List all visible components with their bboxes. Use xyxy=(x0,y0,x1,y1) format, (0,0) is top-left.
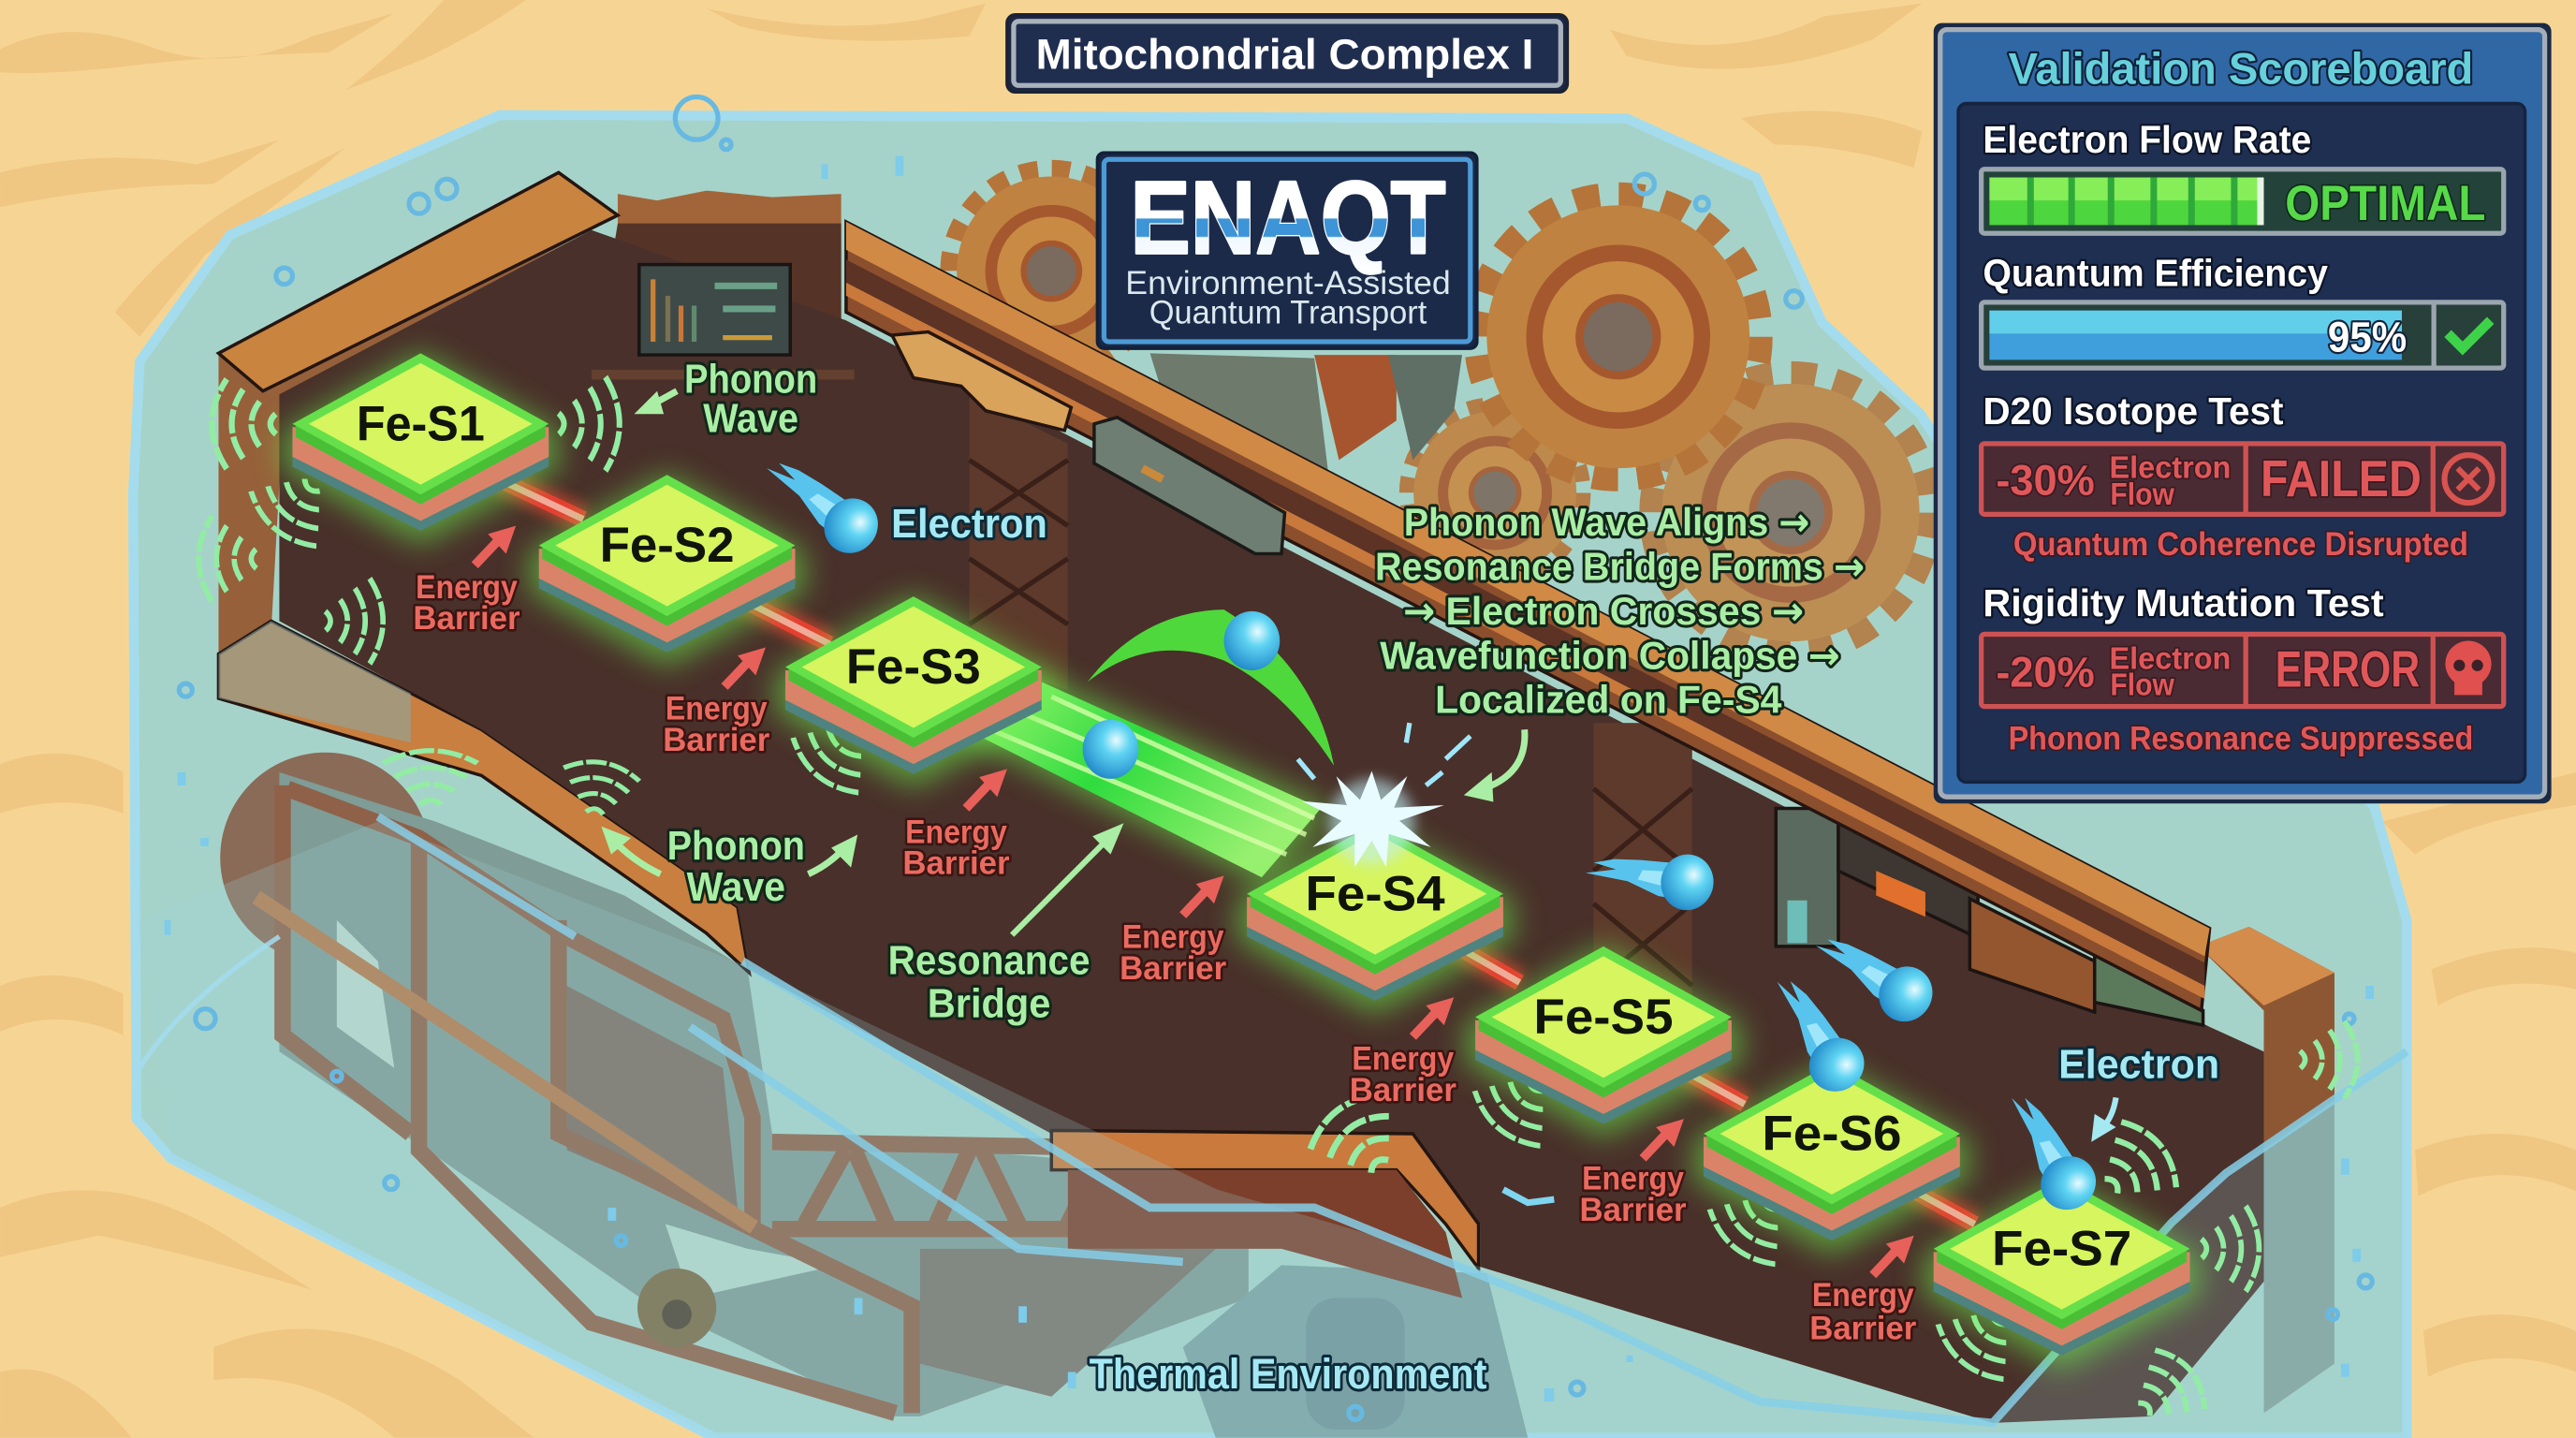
row: rigidity mutation test: Electron xyxy=(2110,641,2231,676)
resonance bridge xyxy=(949,674,1331,888)
row: quantum efficiency: 95% xyxy=(2328,314,2407,361)
sequence text block: Phonon Wave Aligns → xyxy=(1404,499,1809,545)
red energy links xyxy=(493,477,1975,1224)
ENAQT box: Quantum Transport xyxy=(1149,295,1427,331)
room walls xyxy=(218,172,2334,1413)
node Fe-S5 xyxy=(1466,945,1741,1138)
electron above Fe-S5 xyxy=(1582,839,1718,914)
energy barrier labels: Barrier xyxy=(413,600,520,637)
energy barrier labels: Barrier xyxy=(1809,1310,1917,1346)
row: quantum efficiency: Quantum Efficiency xyxy=(1983,251,2328,294)
awning and grey device over girder xyxy=(892,332,1284,553)
energy barrier labels: Barrier xyxy=(902,845,1010,882)
node Fe-S3 xyxy=(775,594,1051,788)
node Fe-S3: Fe-S3 xyxy=(846,639,981,695)
icon: skull xyxy=(2445,640,2492,695)
phonon waves xyxy=(198,377,2358,1438)
row: D20 isotope test: -30% xyxy=(1996,456,2095,504)
node Fe-S4: Fe-S4 xyxy=(1305,866,1445,921)
label: phonon wave lower: Phonon xyxy=(667,823,805,869)
electron on arc xyxy=(1224,611,1280,670)
node Fe-S4 xyxy=(1237,822,1513,1016)
node Fe-S7: Fe-S7 xyxy=(1992,1221,2131,1276)
row: electron flow rate xyxy=(1982,118,2504,233)
left chassis machine xyxy=(220,753,1528,1438)
energy barrier labels: Energy xyxy=(416,569,518,606)
electron near Fe-S2 xyxy=(754,441,889,564)
energy barrier labels: Energy xyxy=(1582,1161,1684,1197)
sequence text block: Wavefunction Collapse → xyxy=(1380,632,1840,678)
energy barrier labels: Barrier xyxy=(1350,1072,1456,1108)
back wall machinery xyxy=(592,265,2203,1027)
label: resonance bridge: Bridge xyxy=(928,980,1050,1026)
orange front ledge xyxy=(1051,1130,1479,1298)
title box xyxy=(1007,15,1567,92)
sequence text block: Resonance Bridge Forms → xyxy=(1375,544,1865,590)
icon: check xyxy=(2448,320,2491,348)
floor xyxy=(279,230,2263,1423)
electron above Fe-S7 xyxy=(1993,1080,2106,1220)
node Fe-S1: Fe-S1 xyxy=(357,396,485,451)
label: electron: Electron xyxy=(891,501,1047,547)
energy barrier labels: Barrier xyxy=(663,722,770,758)
scoreboard title: Validation Scoreboard xyxy=(2009,45,2473,95)
ENAQT box xyxy=(1097,153,1477,348)
sequence text block xyxy=(1375,499,1865,801)
row: D20 isotope test: Quantum Coherence Disrupted xyxy=(2013,526,2468,563)
row: D20 isotope test xyxy=(1982,389,2504,563)
stray electron fleck xyxy=(1503,1190,1554,1203)
gears behind the girder xyxy=(952,171,1926,648)
right-side machinery xyxy=(1776,808,2203,1025)
node Fe-S2 xyxy=(529,473,805,668)
node Fe-S6 xyxy=(1693,1062,1969,1255)
title box: Mitochondrial Complex I xyxy=(1036,31,1533,79)
energy barrier labels: Barrier xyxy=(1580,1192,1687,1228)
energy barrier labels: Energy xyxy=(905,814,1007,850)
label: electron bottom right: Electron xyxy=(2058,1041,2219,1087)
label: phonon wave lower: Wave xyxy=(687,864,785,910)
row: D20 isotope test: D20 Isotope Test xyxy=(1983,389,2284,433)
row: electron flow rate: Electron Flow Rate xyxy=(1983,118,2311,161)
energy barrier labels: Energy xyxy=(1122,919,1224,956)
row: rigidity mutation test xyxy=(1982,581,2504,756)
electrons xyxy=(754,441,2106,1220)
label: phonon wave top xyxy=(634,356,817,442)
ENAQT box: Environment-Assisted xyxy=(1125,265,1451,301)
energy barrier arrows xyxy=(475,526,1914,1275)
electron right xyxy=(1805,917,1943,1032)
row: D20 isotope test: FAILED xyxy=(2261,450,2422,507)
label: resonance bridge xyxy=(888,823,1123,1026)
row: D20 isotope test: Electron xyxy=(2110,451,2231,486)
energy barrier labels: Energy xyxy=(1352,1041,1455,1078)
row: rigidity mutation test: ERROR xyxy=(2276,641,2420,698)
energy barrier labels xyxy=(413,569,1917,1346)
electron on bridge xyxy=(1083,720,1138,779)
water surface lines xyxy=(139,816,2407,1423)
label: phonon wave top: Wave xyxy=(703,396,798,442)
row: rigidity mutation test: Flow xyxy=(2110,668,2174,702)
electron above Fe-S6 xyxy=(1759,963,1874,1102)
row: rigidity mutation test: Phonon Resonance Suppressed xyxy=(2009,720,2473,756)
row: rigidity mutation test: -20% xyxy=(1996,649,2095,697)
Fe-S nodes xyxy=(283,352,2200,1371)
burst at Fe-S4 xyxy=(1298,723,1471,867)
node Fe-S6: Fe-S6 xyxy=(1762,1107,1902,1162)
node Fe-S5: Fe-S5 xyxy=(1533,990,1674,1045)
water front overlay xyxy=(137,822,2407,1438)
row: electron flow rate: OPTIMAL xyxy=(2285,176,2485,231)
row: D20 isotope test: Flow xyxy=(2110,477,2174,512)
node Fe-S1 xyxy=(283,352,559,546)
sequence text block: Localized on Fe-S4 xyxy=(1435,678,1782,722)
node Fe-S7 xyxy=(1924,1177,2200,1371)
row: quantum efficiency xyxy=(1982,251,2504,368)
label: phonon wave top: Phonon xyxy=(684,356,817,402)
label: phonon wave lower xyxy=(601,823,857,910)
label: thermal environment: Thermal Environment xyxy=(1090,1350,1486,1398)
water bubbles xyxy=(165,97,2374,1419)
energy barrier labels: Barrier xyxy=(1120,950,1227,987)
label: resonance bridge: Resonance xyxy=(888,938,1090,984)
node Fe-S2: Fe-S2 xyxy=(600,518,735,573)
panel: validation scoreboard xyxy=(1934,23,2552,803)
energy barrier labels: Energy xyxy=(666,691,768,727)
wall monitor xyxy=(639,265,790,355)
label: electron bottom right xyxy=(2058,1041,2219,1142)
sequence text block: → Electron Crosses → xyxy=(1403,588,1804,634)
icon: failed cross xyxy=(2445,455,2492,503)
row: rigidity mutation test: Rigidity Mutation Test xyxy=(1983,581,2384,624)
ENAQT box: ENAQT xyxy=(1131,160,1445,275)
tunnelling arc xyxy=(1088,609,1334,766)
energy barrier labels: Energy xyxy=(1812,1277,1914,1313)
girder xyxy=(846,222,2210,1010)
truss pillars xyxy=(970,394,1692,1027)
